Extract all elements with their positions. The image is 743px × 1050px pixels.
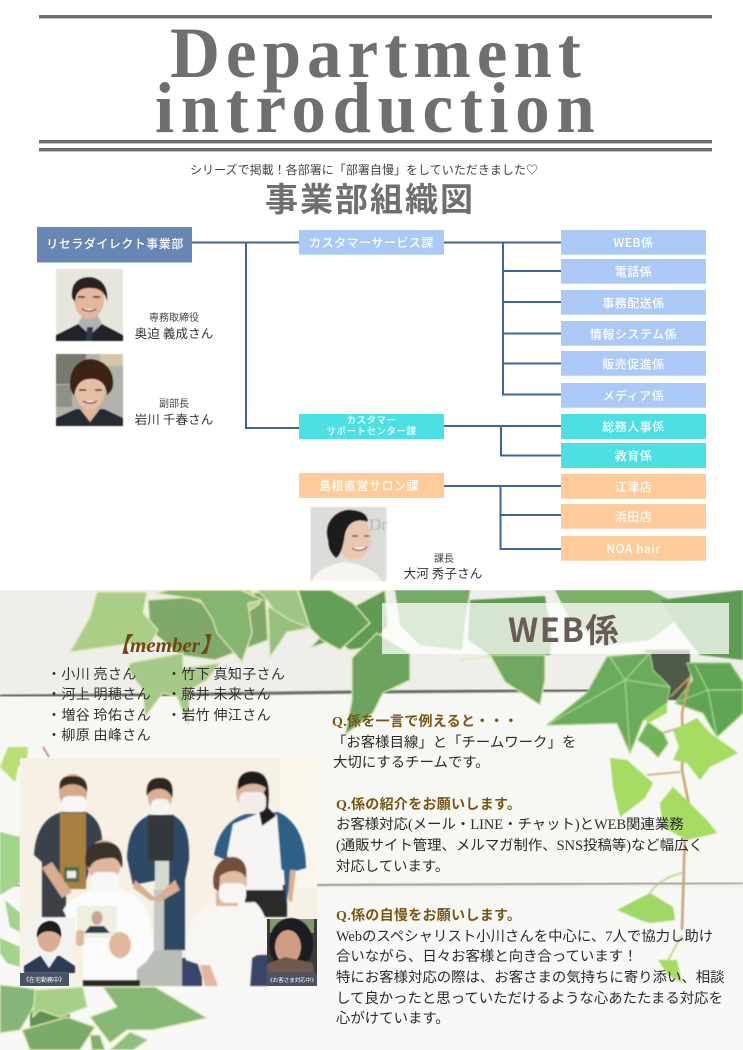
large right ivy leaves bbox=[547, 650, 743, 757]
member heading: 【member】 bbox=[109, 633, 221, 657]
upper ivy leaves bbox=[70, 590, 743, 735]
name: section chief: 課長 bbox=[434, 550, 454, 565]
team boxes: WEB係 bbox=[614, 234, 653, 251]
portrait: section chief: Dr bbox=[369, 515, 387, 534]
person: front right bbox=[186, 857, 268, 986]
section box: customer support centre bbox=[299, 412, 444, 439]
name: deputy manager bbox=[135, 395, 213, 428]
heading box: WEB team: WEB係 bbox=[508, 604, 620, 652]
inset photo: remote worker: 《在宅勤務中》 bbox=[23, 975, 65, 984]
Q3 text block: して良かったと思っていただけるような心あたたまる対応を bbox=[336, 990, 723, 1007]
team boxes bbox=[561, 230, 706, 561]
Q2 text block: (通販サイト管理、メルマガ制作、SNS投稿等)など幅広く bbox=[336, 836, 703, 854]
team photo bbox=[20, 758, 317, 986]
person: back right bbox=[214, 772, 306, 917]
team boxes: 教育係 bbox=[615, 447, 652, 464]
member list: ・岩竹 伸江さん bbox=[167, 705, 271, 725]
division box bbox=[37, 227, 192, 262]
name: section chief bbox=[404, 550, 482, 582]
team boxes: 事務配送係 bbox=[602, 294, 665, 312]
member list: ・藤井 未来さん bbox=[167, 684, 271, 704]
wood background bbox=[0, 590, 743, 1050]
title: Department introduction: introduction bbox=[155, 69, 595, 148]
team boxes: 総務人事係 bbox=[602, 418, 665, 435]
member list: ・柳原 由峰さん bbox=[47, 725, 151, 745]
person: back centre bbox=[127, 778, 189, 986]
inset photo: on customer call: 《お客さま対応中》 bbox=[267, 976, 317, 984]
name: managing director: 奥迫 義成さん bbox=[135, 323, 213, 342]
division box: リセラダイレクト事業部 bbox=[46, 235, 184, 252]
Q1 text block bbox=[332, 714, 576, 771]
section box: customer support centre: カスタマー bbox=[346, 412, 397, 426]
team boxes: 情報システム係 bbox=[590, 326, 677, 342]
section box: Shimane salons bbox=[299, 473, 444, 498]
Q2 text block: 対応しています。 bbox=[336, 858, 449, 875]
lower left ivy leaves bbox=[0, 985, 207, 1050]
portrait: deputy manager bbox=[56, 354, 123, 426]
heading: organisation chart: 事業部組織図 bbox=[265, 173, 473, 221]
Q3 text block: 心がけています。 bbox=[336, 1010, 450, 1027]
Q3 text block: 合いながら、日々お客様と向き合っています！ bbox=[336, 948, 638, 965]
name: managing director bbox=[135, 309, 213, 342]
Q2 text block bbox=[336, 796, 703, 875]
heading box: WEB team bbox=[382, 603, 729, 654]
Q1 text block: 大切にするチームです。 bbox=[333, 754, 490, 771]
name: managing director: 専務取締役 bbox=[149, 309, 199, 324]
name: deputy manager: 岩川 千春さん bbox=[135, 409, 213, 428]
section box: customer support centre: サポートセンター課 bbox=[326, 424, 417, 438]
Q1 text block: 「お客様目線」と「チームワーク」を bbox=[332, 734, 576, 751]
panel: WEB team bbox=[0, 590, 743, 1050]
portrait: managing director bbox=[56, 269, 123, 341]
Q3 text block: Q.係の自慢をお願いします。 bbox=[336, 907, 521, 924]
person: back left bbox=[34, 774, 102, 917]
team boxes: 江津店 bbox=[615, 478, 652, 495]
name: section chief: 大河 秀子さん bbox=[404, 563, 482, 582]
team boxes: NOA hair bbox=[606, 540, 661, 557]
Q3 text block bbox=[336, 907, 725, 1027]
person: front left bbox=[63, 840, 154, 986]
Q3 text block: Webのスペシャリスト小川さんを中心に、7人で協力し助け bbox=[336, 928, 713, 945]
section box: customer service: カスタマーサービス課 bbox=[309, 234, 434, 251]
section box: customer service bbox=[299, 230, 444, 255]
lime ivy leaves bbox=[0, 703, 738, 983]
Q3 text block: 特にお客様対応の際は、お客さまの気持ちに寄り添い、相談 bbox=[336, 969, 725, 986]
title: Department introduction: Department bbox=[170, 14, 581, 93]
inset photo: remote worker bbox=[20, 918, 75, 986]
header rules bbox=[39, 15, 712, 151]
name: deputy manager: 副部長 bbox=[159, 395, 189, 410]
Q1 text block: Q.係を一言で例えると・・・ bbox=[332, 714, 518, 730]
subtitle line: シリーズで掲載！各部署に「部署自慢」をしていただきました♡ bbox=[190, 161, 538, 178]
section box: Shimane salons: 島根直営サロン課 bbox=[319, 477, 419, 494]
member list bbox=[47, 664, 285, 745]
team boxes: 販売促進係 bbox=[602, 356, 665, 372]
member list: ・竹下 真知子さん bbox=[167, 664, 285, 684]
title: Department introduction bbox=[155, 14, 595, 148]
ivy stem bbox=[647, 677, 690, 960]
member list: ・小川 亮さん bbox=[47, 664, 137, 684]
member list: ・河上 明穂さん bbox=[47, 684, 151, 704]
inset photo: on customer call bbox=[267, 918, 317, 986]
org chart bbox=[37, 227, 706, 561]
connector lines bbox=[192, 242, 561, 549]
held card bbox=[76, 906, 131, 958]
team boxes: 電話係 bbox=[615, 263, 652, 280]
ivy leaves bbox=[0, 590, 743, 1050]
portrait: section chief bbox=[310, 507, 387, 581]
member list: ・増谷 玲佑さん bbox=[47, 705, 151, 725]
team boxes: メディア係 bbox=[603, 387, 664, 404]
Q2 text block: お客様対応(メール・LINE・チャット)とWEB関連業務 bbox=[336, 816, 684, 833]
team boxes: 浜田店 bbox=[615, 508, 652, 525]
small stem, left bbox=[43, 747, 49, 757]
Q2 text block: Q.係の紹介をお願いします。 bbox=[336, 796, 521, 813]
